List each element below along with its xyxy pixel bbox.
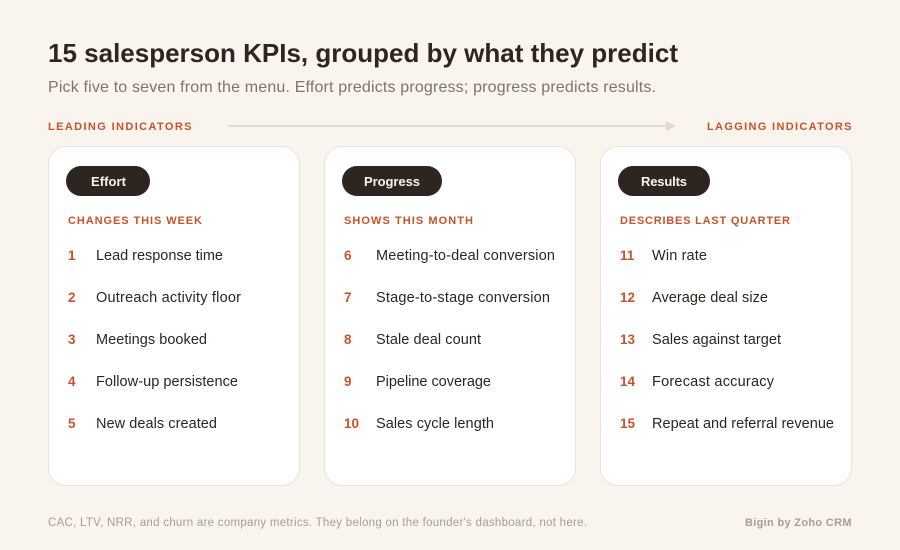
kpi list: results: Repeat and referral revenue — [652, 416, 834, 432]
kpi list: progress: 9 — [344, 374, 352, 389]
title: 15 salesperson KPIs, grouped by what they predict — [48, 38, 678, 68]
kpi list: effort: 5 — [68, 416, 76, 431]
kpi list: results: 12 — [620, 290, 635, 305]
kpi list: progress: 7 — [344, 290, 352, 305]
kpi list: effort — [68, 248, 241, 432]
kpi list: effort: Meetings booked — [96, 332, 207, 348]
kpi list: effort: New deals created — [96, 416, 217, 432]
brand credit: Bigin by Zoho CRM — [745, 517, 852, 529]
kpi list: progress: Stale deal count — [376, 332, 481, 348]
panel: progress — [324, 146, 576, 486]
kpi list: results: 13 — [620, 332, 636, 347]
lagging indicators label: LAGGING INDICATORS — [707, 121, 852, 133]
kpi list: progress: 6 — [344, 248, 352, 263]
kpi list: results: 14 — [620, 374, 636, 389]
kpi list: results: Forecast accuracy — [652, 374, 775, 390]
kpi list: progress: Pipeline coverage — [376, 374, 491, 390]
kpi list: progress: Meeting-to-deal conversion — [376, 248, 555, 264]
panel: results — [600, 146, 852, 486]
kpi list: progress: Stage-to-stage conversion — [376, 290, 550, 306]
subtitle: Pick five to seven from the menu. Effort predicts progress; progress predicts results. — [48, 79, 656, 96]
pill: progress: Progress — [364, 174, 420, 189]
kpi list: results — [620, 248, 834, 432]
footnote: CAC, LTV, NRR, and churn are company metrics. They belong on the founder's dashboard, not here. — [48, 517, 587, 529]
pill: results: Results — [641, 174, 687, 189]
kpi list: progress — [344, 248, 555, 432]
kpi list: effort: 2 — [68, 290, 76, 305]
arrow: leading to lagging — [228, 121, 676, 131]
kpi list: progress: Sales cycle length — [376, 416, 494, 432]
kpi list: results: Average deal size — [652, 290, 768, 306]
panel: effort — [48, 146, 300, 486]
kpi list: results: Win rate — [652, 248, 707, 264]
kpi list: results: 15 — [620, 416, 636, 431]
kpi list: results: 11 — [620, 248, 635, 263]
subheading: effort: CHANGES THIS WEEK — [68, 215, 202, 227]
pill: effort — [66, 166, 150, 196]
kpi list: effort: 3 — [68, 332, 76, 347]
kpi list: effort: 1 — [68, 248, 76, 263]
leading indicators label: LEADING INDICATORS — [48, 121, 192, 133]
kpi list: results: Sales against target — [652, 332, 781, 348]
kpi list: effort: Follow-up persistence — [96, 374, 238, 390]
kpi list: effort: Outreach activity floor — [96, 290, 241, 306]
subheading: progress: SHOWS THIS MONTH — [344, 215, 473, 227]
pill: progress — [342, 166, 442, 196]
kpi list: effort: 4 — [68, 374, 76, 389]
kpi list: progress: 8 — [344, 332, 352, 347]
kpi list: effort: Lead response time — [96, 248, 223, 264]
pill: results — [618, 166, 710, 196]
kpi list: progress: 10 — [344, 416, 359, 431]
subheading: results: DESCRIBES LAST QUARTER — [620, 215, 790, 227]
pill: effort: Effort — [91, 174, 127, 189]
